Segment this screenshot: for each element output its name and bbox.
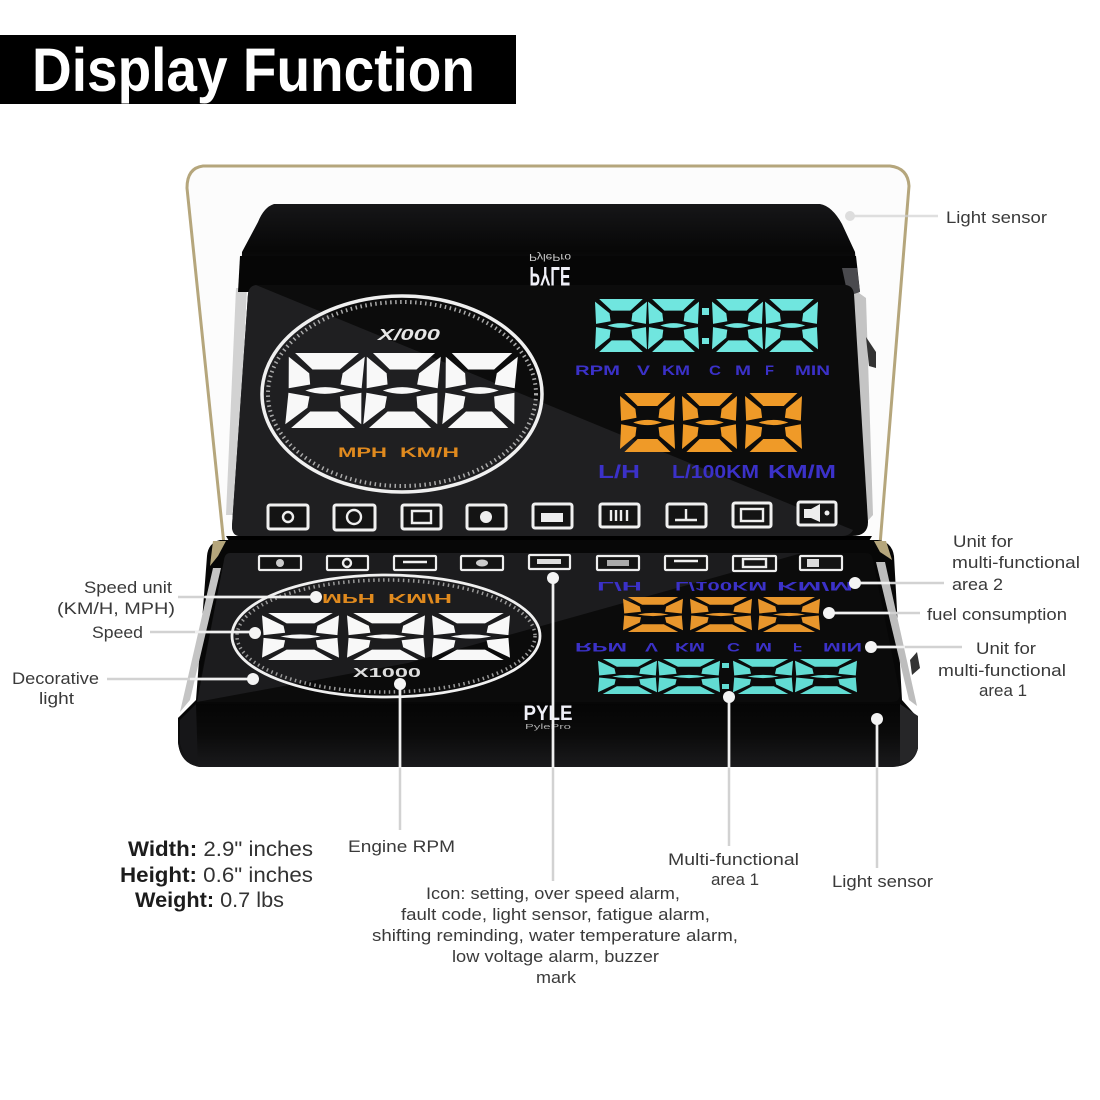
silver side strips — [226, 288, 247, 515]
speed dial: MPH — [338, 444, 387, 460]
leader: area 2 units — [849, 577, 944, 589]
specifications — [120, 838, 313, 912]
label: icons: shifting reminding, water temperature alarm, — [372, 926, 738, 945]
label: unit for area 1: multi-functional — [938, 661, 1066, 680]
mirrored area 1 units: V — [645, 640, 658, 654]
area 2 units — [598, 462, 836, 482]
brand mark lower: PylePro — [525, 724, 571, 731]
leader: icons — [547, 572, 559, 881]
upper icon row — [268, 502, 836, 530]
mirrored area 1 units: M — [755, 640, 772, 654]
mirrored area 1 units: C — [727, 640, 740, 654]
label: icons: low voltage alarm, buzzer — [452, 947, 659, 966]
label: multi-functional area 1 — [668, 850, 799, 889]
label: unit for area 1: area 1 — [979, 681, 1027, 700]
label: icons: Icon: setting, over speed alarm, — [426, 884, 680, 903]
label: decorative light: light — [39, 689, 74, 708]
label: engine RPM: Engine RPM — [348, 837, 455, 856]
label: icons — [372, 884, 738, 987]
area 2 units: KM/M — [768, 462, 836, 482]
reflector frame — [187, 166, 909, 545]
specifications: Weight: 0.7 lbs — [135, 889, 284, 912]
lower device: base with mirrored display — [178, 540, 920, 767]
front bezel — [178, 704, 918, 767]
brand mark lower: PYLE — [524, 702, 572, 725]
mirrored area 2 units — [597, 579, 853, 593]
leader: engine RPM — [394, 678, 406, 830]
mirrored speed dial: X1000 — [353, 665, 421, 680]
leader: speed unit — [178, 591, 322, 603]
label: decorative light — [12, 669, 99, 708]
label: unit for area 1 — [938, 639, 1066, 700]
area 2 units: L/H — [598, 462, 640, 482]
mirrored speed dial: MPH — [322, 591, 375, 606]
label: speed: Speed — [92, 623, 143, 642]
mirrored fuel digits — [623, 597, 820, 632]
fuel consumption digits — [620, 393, 802, 452]
label: fuel consumption: fuel consumption — [927, 605, 1067, 624]
leader: decorative light — [107, 673, 259, 685]
label: unit for area 2: Unit for — [953, 532, 1013, 551]
label: speed unit: (KM/H, MPH) — [57, 599, 175, 618]
mirrored speed dial — [232, 575, 540, 697]
specifications: Width: 2.9" inches — [128, 838, 313, 861]
label: unit for area 2: multi-functional — [952, 553, 1080, 572]
area 1 units: KM — [662, 362, 690, 378]
mirrored area 1 units: F — [793, 640, 802, 654]
mirrored area 1 units: MIN — [823, 640, 862, 654]
brand mark upper — [529, 251, 572, 291]
speed dial — [262, 296, 542, 492]
brand mark upper: PylePro — [529, 251, 572, 262]
label: unit for area 2 — [952, 532, 1080, 594]
speed dial: X/000 — [377, 327, 440, 344]
mirrored area 1 units — [575, 640, 862, 654]
lower screen — [197, 553, 900, 702]
top bezel — [241, 204, 858, 290]
multi-functional area 1 digits — [595, 299, 818, 352]
label: multi-functional area 1: area 1 — [711, 870, 759, 889]
mirrored area 1 units: RPM — [575, 640, 627, 654]
label: multi-functional area 1: Multi-functional — [668, 850, 799, 869]
lower icon row — [259, 555, 842, 571]
leader: light sensor bottom — [871, 713, 883, 868]
label: light sensor bottom: Light sensor — [832, 872, 933, 891]
leader: multi-functional area 1 — [723, 691, 735, 846]
mirrored area 1 units: KM — [675, 640, 705, 654]
leader: light sensor top — [845, 211, 938, 221]
upper device: reflective screen and display — [187, 166, 909, 546]
leader: speed — [150, 627, 261, 639]
label: icons: fault code, light sensor, fatigue alarm, — [401, 905, 710, 924]
area 1 units: V — [637, 362, 651, 378]
mirrored cyan digits — [598, 659, 857, 694]
upper screen — [232, 285, 868, 536]
label: decorative light: Decorative — [12, 669, 99, 688]
label: unit for area 2: area 2 — [952, 575, 1003, 594]
mirrored white digits — [262, 613, 339, 660]
area 2 units: L/100KM — [672, 462, 759, 482]
mirrored area 2 units: L/H — [597, 579, 642, 593]
white speed digits — [285, 353, 365, 428]
title: Display Function — [32, 36, 475, 104]
mirrored area 2 units: KM/M — [777, 579, 853, 593]
leader: fuel consumption — [823, 607, 920, 619]
leader: area 1 units — [865, 641, 962, 653]
label: speed unit — [57, 578, 175, 618]
label: unit for area 1: Unit for — [976, 639, 1036, 658]
label: light sensor top: Light sensor — [946, 208, 1047, 227]
area 1 units: C — [709, 362, 721, 378]
brand mark upper: PYLE — [530, 261, 570, 291]
area 1 units: MIN — [795, 362, 830, 378]
speed dial: KM/H — [400, 444, 459, 460]
area 1 units: M — [735, 362, 751, 378]
mirrored area 2 units: L/100KM — [675, 579, 767, 593]
hinge and base body — [178, 540, 918, 767]
area 1 units: RPM — [575, 362, 620, 378]
label: icons: mark — [536, 968, 577, 987]
mirrored speed dial: KM/H — [388, 591, 452, 606]
specifications: Height: 0.6" inches — [120, 864, 313, 887]
label: speed unit: Speed unit — [84, 578, 172, 597]
area 1 units: F — [765, 362, 774, 378]
area 1 units — [575, 362, 830, 378]
